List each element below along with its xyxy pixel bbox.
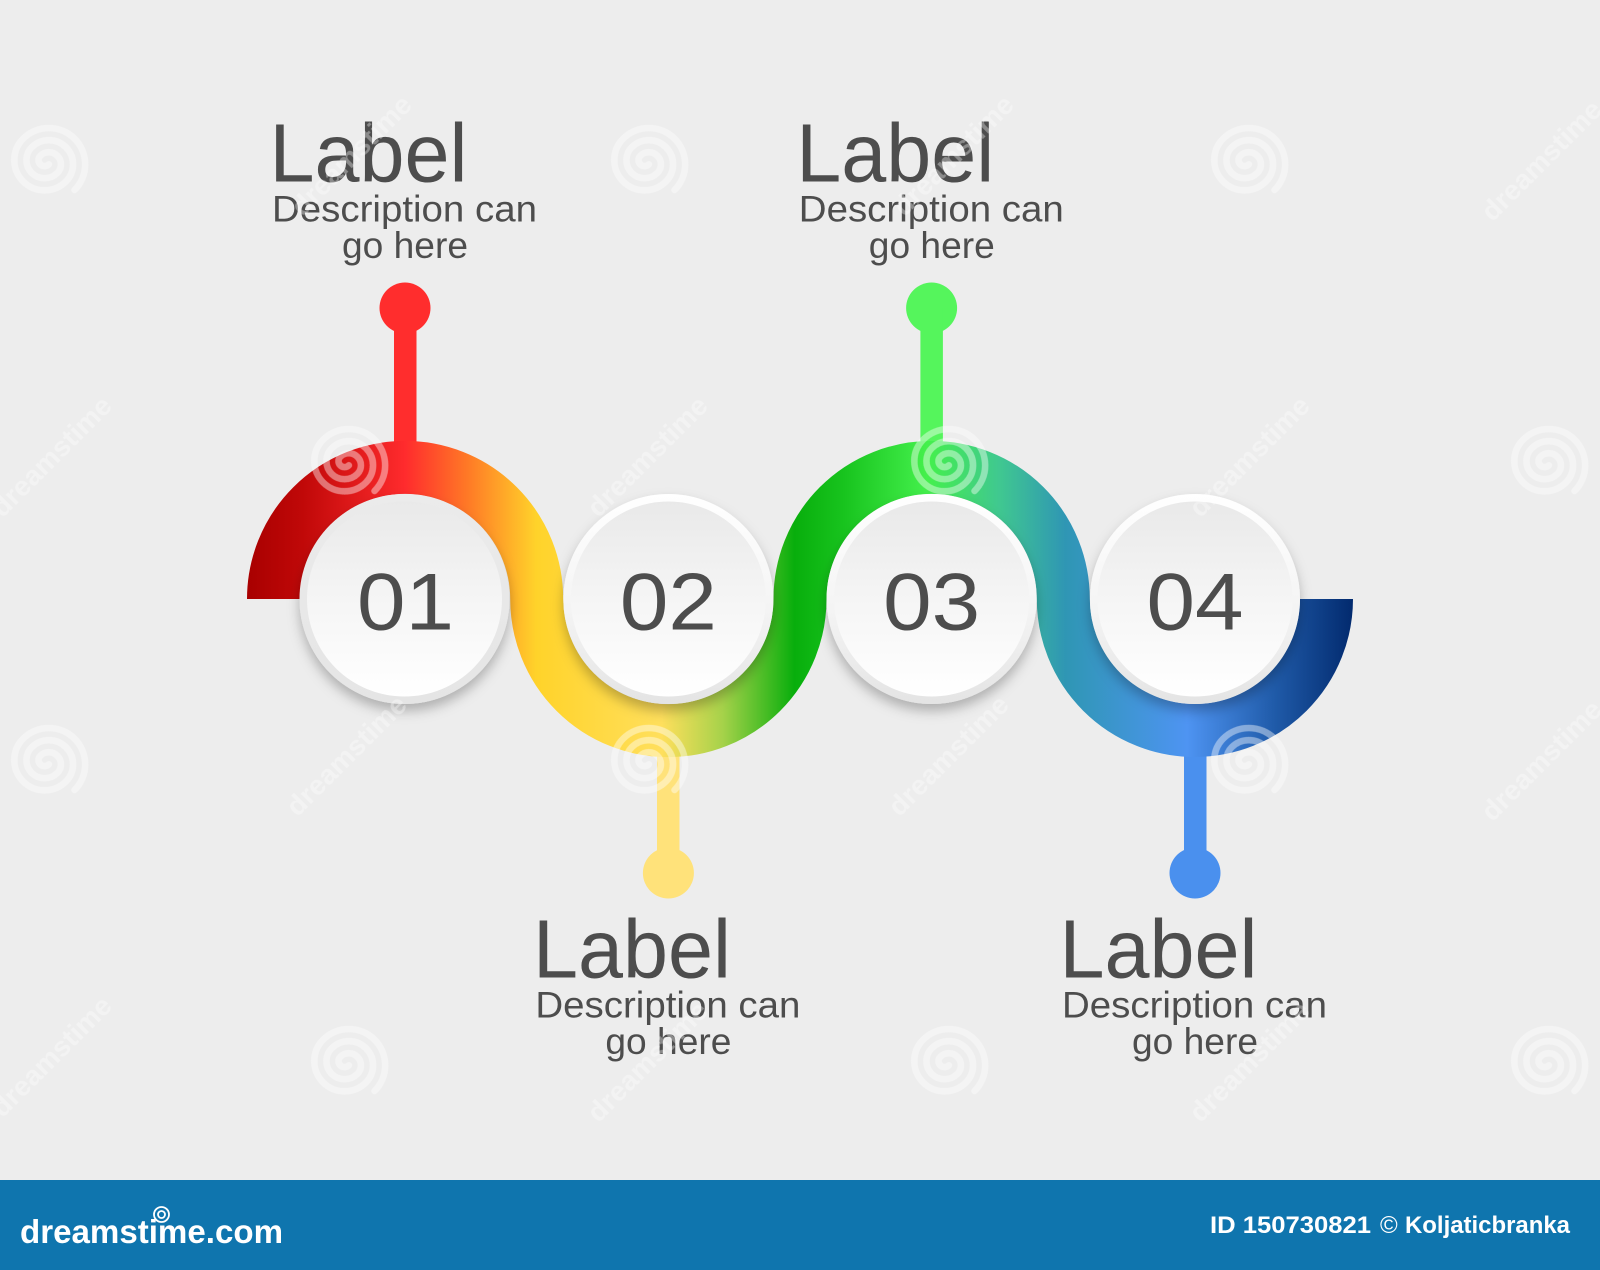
footer credit text: Koljaticbranka [1405,1212,1571,1239]
watermark diagonal text: dreamstime [1183,390,1316,523]
number circle 02: 02 [620,558,717,648]
text block: step 4: go here [1132,1021,1258,1062]
footer bar [0,1180,1600,1270]
number circle 03 [827,494,1037,704]
connector stems and dots [380,282,1220,898]
text block: step 2: Label [533,903,731,996]
text block: step 4 [1060,903,1327,1062]
footer credit text: © [1380,1212,1398,1239]
footer credit text [1210,1212,1571,1239]
footer credit text: ID 150730821 [1210,1212,1371,1239]
text block: step 3: Label [796,107,994,200]
text block: step 1 [270,107,537,266]
watermark diagonal text: dreamstime [887,89,1020,222]
icon: logo spiral [154,1207,169,1222]
number circle 04: 04 [1146,558,1244,648]
text block: step 1: go here [342,225,468,266]
text block: step 4: Description can [1062,985,1327,1026]
text block: step 3: Description can [799,189,1064,230]
text block: step 2: go here [605,1021,731,1062]
watermark diagonal text: dreamstime [1183,995,1316,1128]
number circle 03: 03 [883,558,980,648]
text block: step 3: go here [869,225,995,266]
number circle 04 [1090,494,1300,704]
text block: step 2: Description can [535,985,800,1026]
stem: step 4 blue [1170,750,1220,898]
stem: step 2 yellow [643,750,694,898]
watermark diagonal text: dreamstime [882,689,1015,822]
stem: step 3 green [906,282,957,448]
number circle 02 [563,494,773,704]
footer logo text: dreamstime.com [20,1213,283,1250]
rainbow wave ribbon [274,467,1326,731]
stem: step 1 red [380,282,430,448]
text block: step 1: Label [270,107,468,200]
watermark diagonal text: dreamstime [581,390,714,523]
text block: step 3 [796,107,1064,266]
text block: step 4: Label [1060,903,1258,996]
watermark diagonal text: dreamstime [285,89,418,222]
number circle 01 [300,494,510,704]
text block: step 1: Description can [272,189,537,230]
watermark diagonal text: dreamstime [581,995,714,1128]
text block: step 2 [533,903,800,1062]
watermark diagonal text: dreamstime [280,689,413,822]
watermark spirals [2,113,1600,1112]
number circle 01: 01 [357,558,454,648]
